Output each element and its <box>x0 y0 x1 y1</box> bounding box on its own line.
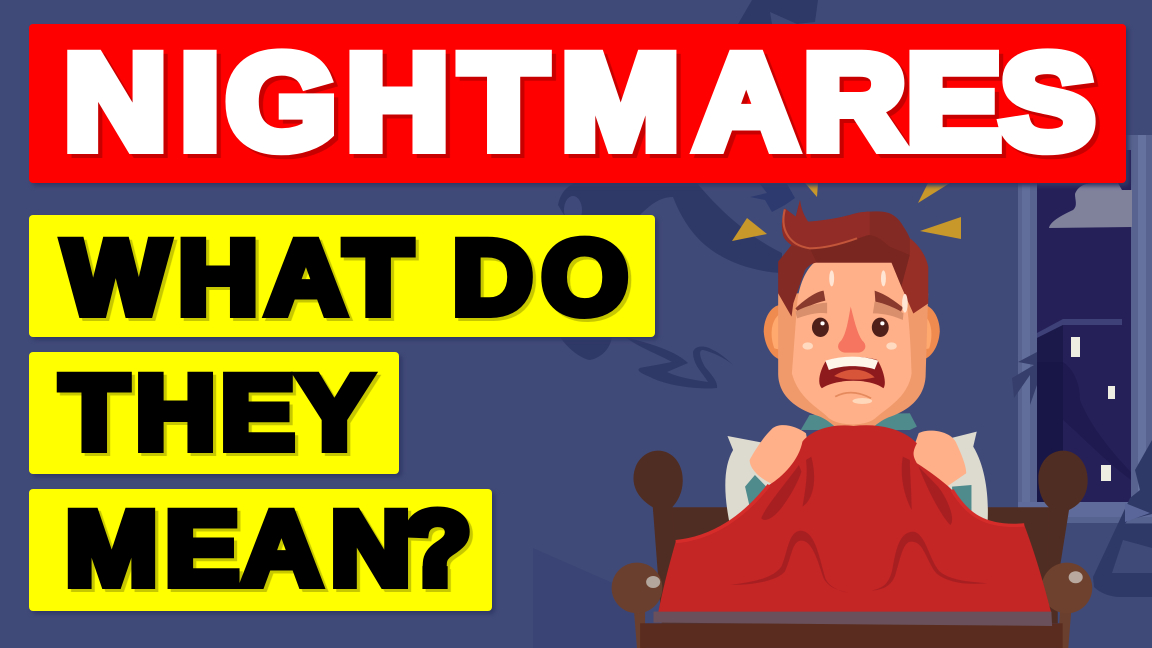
bed rail <box>654 612 1052 626</box>
blanket <box>658 425 1051 613</box>
title text: NIGHTMARES <box>64 28 1095 177</box>
subtitle line 1: WHAT DO <box>63 218 628 336</box>
shirt <box>801 413 917 430</box>
subtitle line 3: MEAN? <box>65 489 471 607</box>
nose <box>838 307 865 353</box>
head <box>764 200 940 431</box>
hands <box>750 425 809 485</box>
character in bed <box>612 200 1092 648</box>
monster shadow <box>558 0 1152 597</box>
floor wedge <box>533 548 640 648</box>
alert marks <box>732 183 961 241</box>
bed headboard <box>612 451 1092 648</box>
eyes <box>812 318 829 337</box>
ears <box>764 305 785 361</box>
face <box>778 293 928 431</box>
window <box>1018 135 1152 523</box>
title banner <box>29 24 1126 183</box>
eyebrows <box>795 291 825 313</box>
hair <box>778 200 928 317</box>
cheeks and sweat <box>802 342 813 350</box>
pillow <box>725 432 988 527</box>
mouth <box>819 357 885 388</box>
subtitle line 2: THEY <box>60 353 371 471</box>
